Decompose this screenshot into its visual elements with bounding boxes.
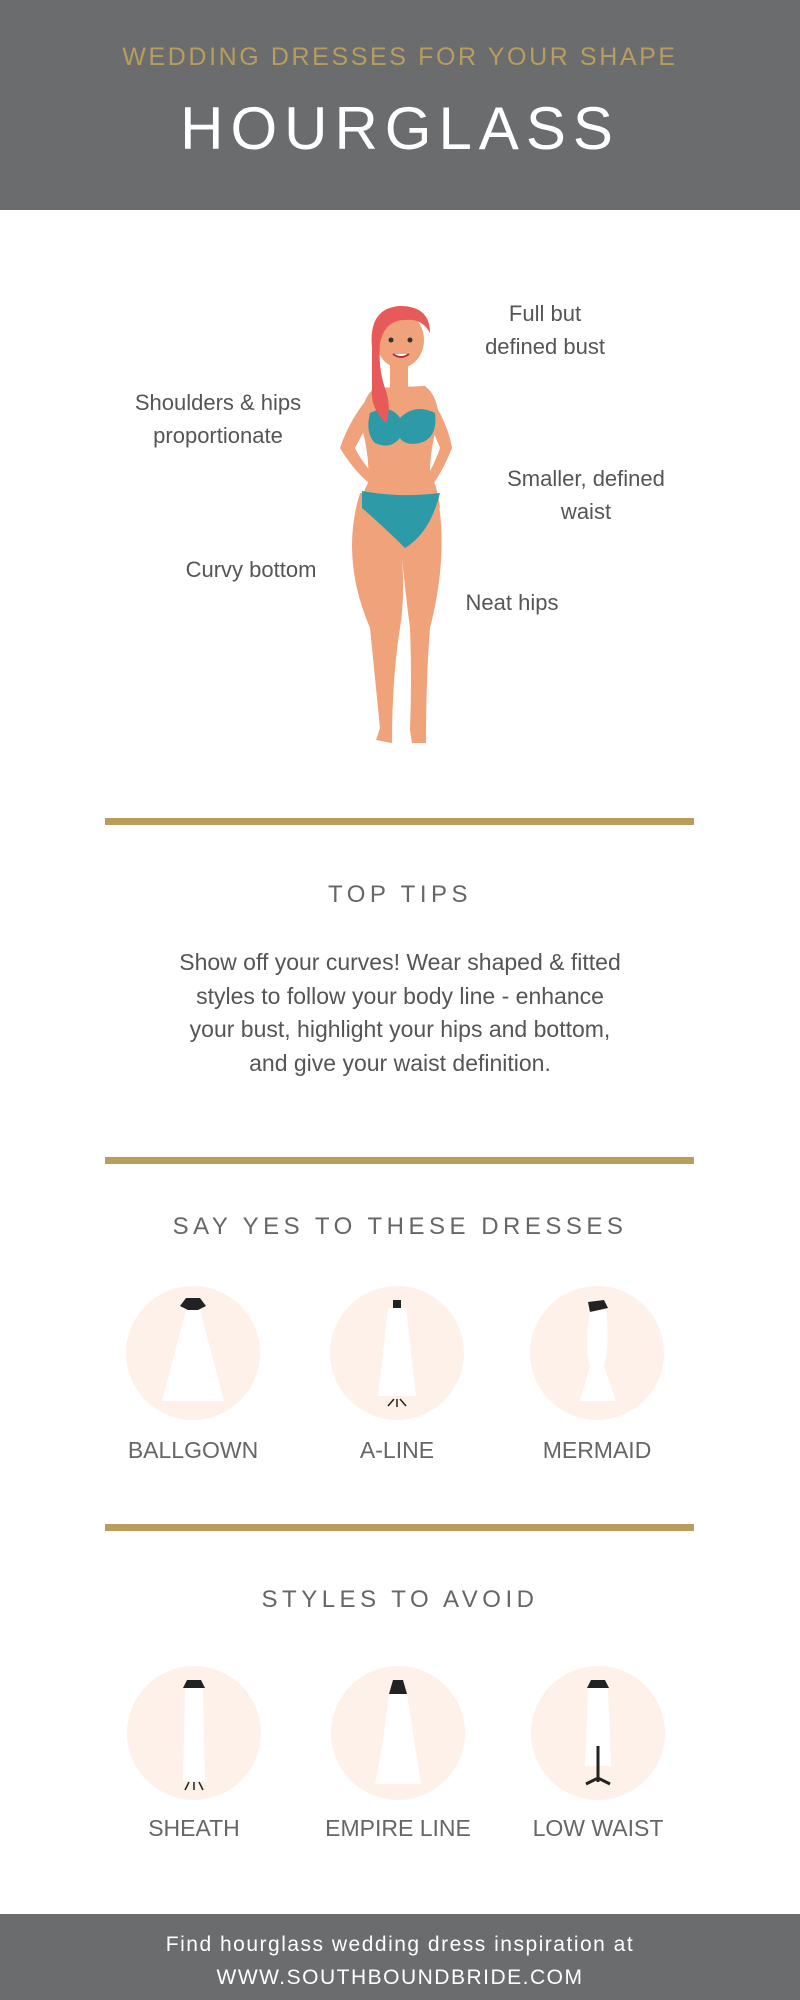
header	[0, 0, 800, 210]
label: waist	[507, 466, 665, 524]
label: neat hips: Neat hips	[466, 590, 558, 615]
dress: sheath	[127, 1666, 261, 1841]
tips text: Show off your curves! Wear shaped & fitted	[179, 949, 621, 975]
figure: hourglass woman	[340, 306, 452, 743]
dress: a-line	[330, 1286, 464, 1463]
footer text	[166, 1933, 634, 1989]
dress: low waist: LOW WAIST	[533, 1815, 663, 1841]
heading: top tips: TOP TIPS	[328, 881, 472, 908]
tips text: styles to follow your body line - enhance	[196, 982, 604, 1008]
dress: mermaid: MERMAID	[543, 1437, 651, 1463]
bra	[368, 409, 435, 446]
tips text	[179, 949, 621, 1076]
legs	[352, 493, 442, 743]
dress: mermaid	[530, 1286, 664, 1463]
label: bust	[485, 301, 605, 359]
tips text: and give your waist definition.	[249, 1050, 551, 1076]
label: waist: waist	[561, 499, 611, 524]
neck & head	[390, 358, 408, 388]
heading: styles to avoid: STYLES TO AVOID	[262, 1586, 538, 1613]
title: HOURGLASS	[180, 95, 620, 162]
label: shoulders: proportionate	[153, 423, 283, 448]
hair	[372, 306, 430, 423]
dress: a-line: A-LINE	[360, 1437, 434, 1463]
footer text: WWW.SOUTHBOUNDBRIDE.COM	[216, 1966, 583, 1989]
subtitle: WEDDING DRESSES FOR YOUR SHAPE	[122, 43, 678, 71]
dress: low waist	[531, 1666, 665, 1841]
label: shoulders	[135, 390, 301, 448]
footer	[0, 1914, 800, 2000]
dress: empire line: EMPIRE LINE	[325, 1815, 471, 1841]
label: curvy bottom: Curvy bottom	[186, 557, 316, 582]
dress: empire line	[325, 1666, 471, 1841]
dress: ballgown: BALLGOWN	[128, 1437, 258, 1463]
dress: ballgown	[126, 1286, 260, 1463]
label: bust: defined bust	[485, 334, 605, 359]
label: waist: Smaller, defined	[507, 466, 665, 491]
footer text: Find hourglass wedding dress inspiration at	[166, 1933, 634, 1956]
tips text: your bust, highlight your hips and bottom,	[190, 1016, 610, 1042]
bikini bottom	[362, 491, 440, 548]
arms	[340, 393, 380, 488]
label: shoulders: Shoulders & hips	[135, 390, 301, 415]
torso	[360, 386, 440, 508]
dress: sheath: SHEATH	[148, 1815, 240, 1841]
label: bust: Full but	[509, 301, 581, 326]
heading: say yes: SAY YES TO THESE DRESSES	[173, 1213, 627, 1240]
